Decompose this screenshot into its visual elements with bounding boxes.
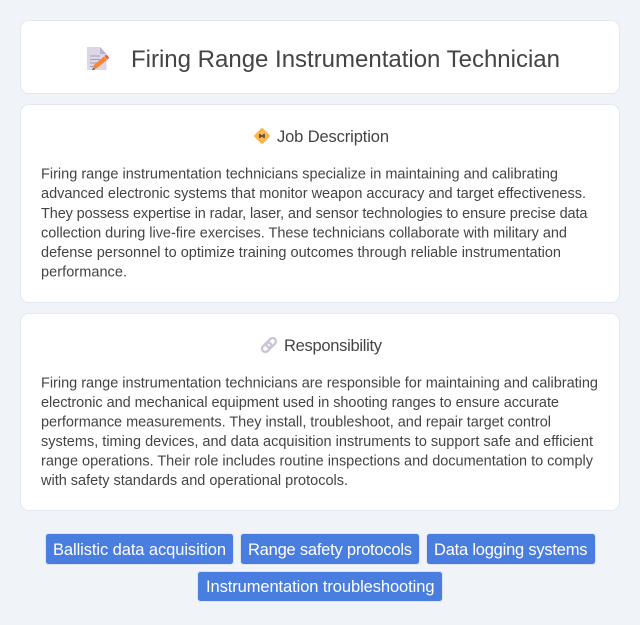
heading: responsibility: Responsibility: [284, 337, 383, 355]
panel: responsibility: [20, 314, 620, 510]
panel: title: [20, 20, 620, 94]
heading: page title: Firing Range Instrumentation Technician: [131, 46, 560, 73]
text: job description body: collection during live-fire exercises. These technicians collaborate with military and: [41, 226, 567, 242]
text: responsibility body: performance measurements. They install, troubleshoot, and repair target control: [41, 414, 551, 430]
heading: job description: Job Description: [277, 128, 389, 146]
text: responsibility body: electronic and mechanical equipment used in shooting ranges to ensure accurate: [41, 395, 559, 411]
text: responsibility body: range operations. Their role includes routine inspections and documentation to comply: [41, 454, 594, 470]
tag: ballistic data acquisition: [46, 534, 234, 564]
text: job description body: performance.: [41, 264, 127, 280]
text: responsibility body: with safety standards and operational protocols.: [40, 473, 348, 489]
tag: instrumentation troubleshooting: Instrumentation troubleshooting: [206, 578, 434, 596]
icon: chain link: [261, 337, 277, 353]
text: job description body: advanced electronic systems that monitor weapon accuracy and target effectiveness.: [41, 186, 586, 202]
text: responsibility body: [40, 376, 598, 489]
icon: orange diamond with puzzle: [254, 128, 270, 144]
tag: range safety protocols: [240, 534, 420, 564]
text: responsibility body: systems, timing devices, and data acquisition instruments to support safe and efficient: [41, 434, 593, 450]
text: responsibility body: Firing range instrumentation technicians are responsible for maintaining and calibrating: [41, 376, 598, 392]
tag: ballistic data acquisition: Ballistic data acquisition: [53, 541, 226, 559]
tag: data logging systems: [426, 534, 596, 564]
text: job description body: Firing range instrumentation technicians specialize in maintaining and calibrating: [41, 166, 558, 182]
tag: data logging systems: Data logging systems: [434, 541, 588, 559]
panel: job description: [20, 104, 620, 302]
tag: range safety protocols: Range safety protocols: [248, 541, 412, 559]
icon: document with pencil: [87, 47, 109, 70]
text: job description body: [41, 166, 588, 280]
text: job description body: defense personnel to optimize training outcomes through reliable instrumentation: [41, 245, 561, 261]
tag: instrumentation troubleshooting: [198, 572, 442, 602]
text: job description body: They possess expertise in radar, laser, and sensor technologies to ensure precise data: [41, 206, 588, 222]
